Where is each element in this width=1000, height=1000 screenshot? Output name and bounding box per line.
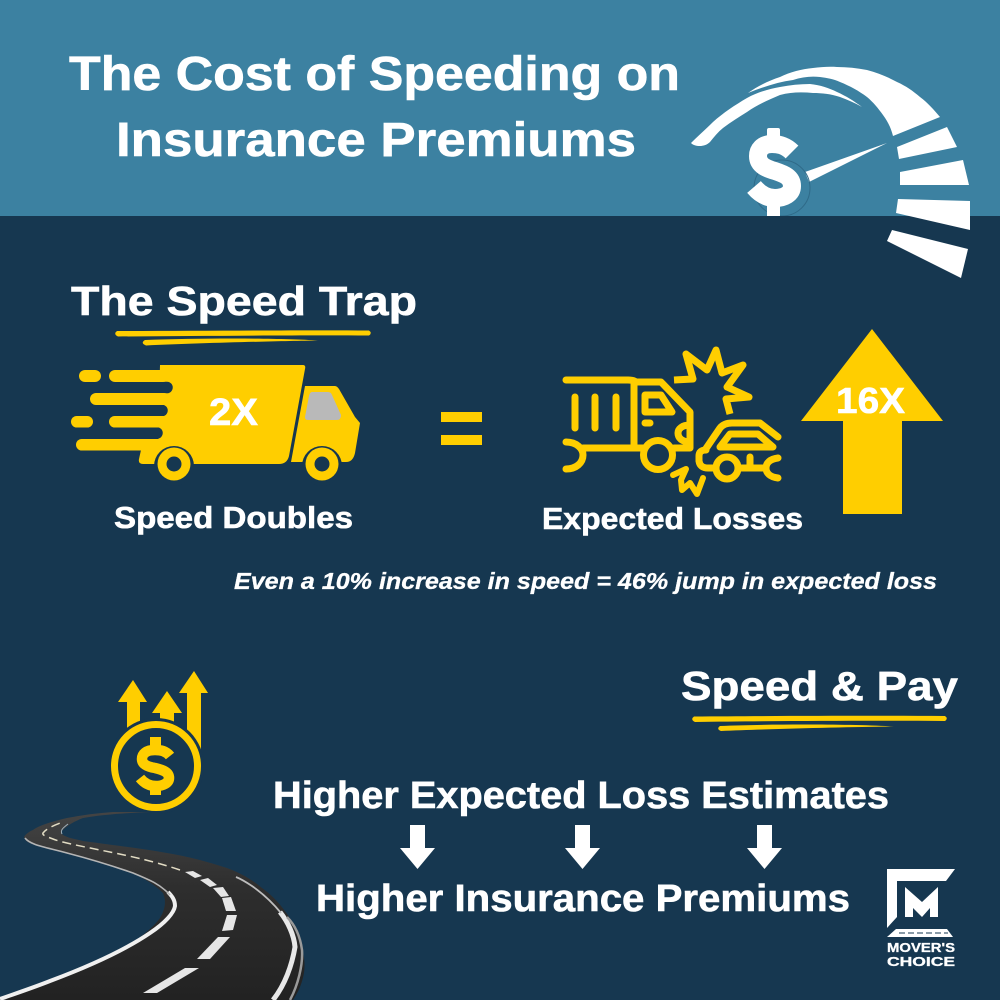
icon: coin with rising arrows (108, 671, 208, 814)
arrow: 16X up: 16X (836, 380, 905, 421)
icon: speeding truck: 2X (209, 392, 259, 434)
arrow: 16X up (801, 329, 943, 514)
logo: Mover's Choice: MOVER'S (887, 941, 955, 955)
logo: Mover's Choice (887, 869, 955, 969)
logo: Mover's Choice: CHOICE (887, 955, 955, 969)
icon: speeding truck (71, 365, 360, 486)
callout: 10% speed increase: Even a 10% increase in speed = 46% jump in expected loss (234, 568, 937, 594)
title: The Cost of Speeding on (69, 48, 680, 101)
heading: Speed & Pay: Speed & Pay (681, 663, 958, 709)
text: Higher Insurance Premiums: Higher Insurance Premiums (316, 878, 850, 920)
illustration: winding road (0, 812, 305, 1000)
header band (0, 0, 1000, 216)
icon: truck and car collision (566, 350, 778, 494)
text: Higher Expected Loss Estimates: Higher Expected Loss Estimates (273, 775, 889, 817)
heading: The Speed Trap (71, 278, 417, 346)
caption: Expected Losses: Expected Losses (542, 501, 803, 536)
arrows: three down arrows (400, 825, 782, 869)
icon: speedometer with dollar sign (691, 67, 970, 278)
heading: Speed & Pay (681, 663, 958, 731)
equals sign (441, 412, 482, 445)
heading: The Speed Trap: The Speed Trap (71, 278, 417, 324)
title (69, 48, 680, 167)
title: Insurance Premiums (116, 114, 636, 167)
caption: Speed Doubles: Speed Doubles (114, 500, 353, 535)
